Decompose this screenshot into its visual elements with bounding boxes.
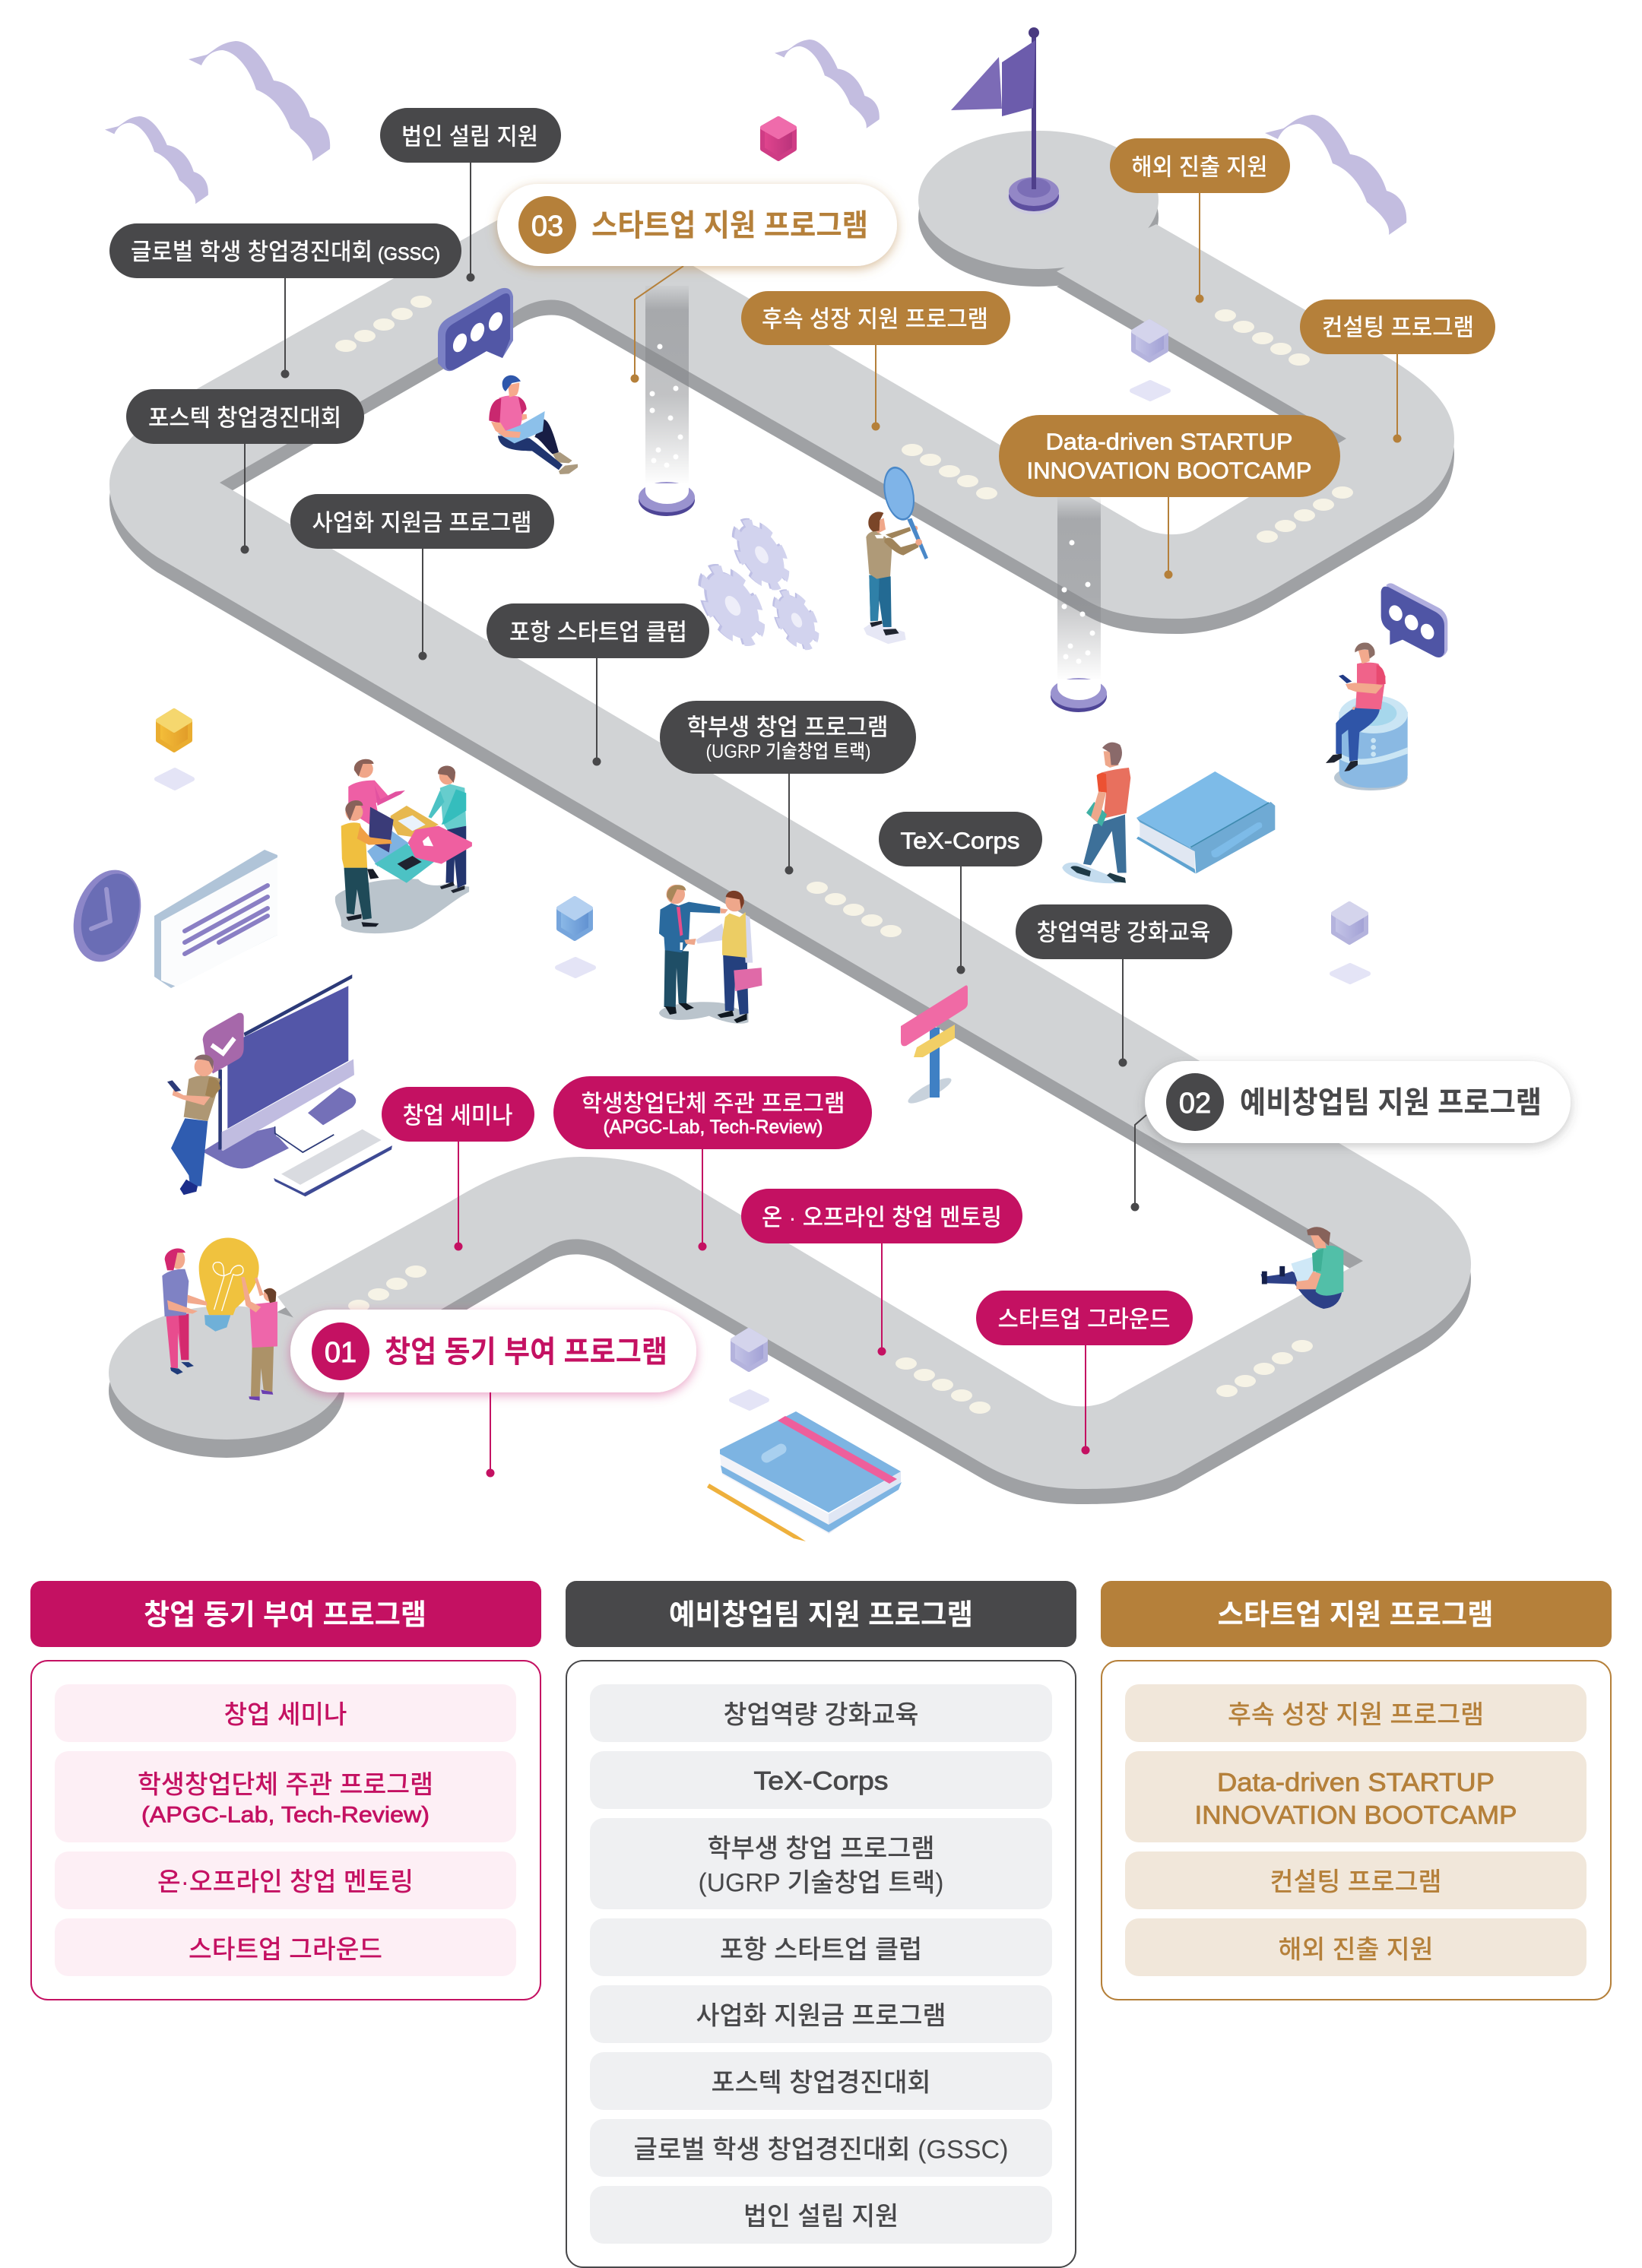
callout: 창업역량 강화교육 — [1016, 904, 1232, 1067]
panel: 스타트업 지원 프로그램: 컨설팅 프로그램 — [1270, 1868, 1441, 1897]
callout: 포항 스타트업 클럽 — [487, 603, 709, 766]
callout: 포항 스타트업 클럽: 포항 스타트업 클럽 — [509, 619, 687, 646]
callout: 학부생 창업 프로그램: (UGRP 기술창업 트랙) — [705, 741, 871, 762]
callout: 03 스타트업 지원 프로그램: 03 — [531, 211, 563, 242]
callout: 03 스타트업 지원 프로그램: 스타트업 지원 프로그램 — [591, 209, 868, 242]
illustration: person on database and chat bubble — [1326, 583, 1447, 790]
illustration: people holding light bulb — [162, 1238, 277, 1401]
icon: lavender cube right — [1332, 904, 1368, 982]
callout: 컨설팅 프로그램: 컨설팅 프로그램 — [1322, 315, 1474, 341]
panel: 예비창업팀 지원 프로그램: TeX-Corps — [754, 1766, 888, 1795]
callout: Data-driven STARTUP INNOVATION BOOTCAMP: INNOVATION BOOTCAMP — [1026, 458, 1312, 483]
panel: 스타트업 지원 프로그램: 후속 성장 지원 프로그램 — [1228, 1701, 1484, 1730]
callout: 03 스타트업 지원 프로그램 — [497, 184, 897, 383]
cloud: top centre — [775, 40, 880, 128]
callout: 학부생 창업 프로그램 — [660, 701, 916, 874]
callout: 스타트업 그라운드 — [976, 1291, 1193, 1455]
callout: 글로벌 학생 창업경진대회: 글로벌 학생 창업경진대회 — [131, 239, 372, 265]
panel: 창업 동기 부여 프로그램: 창업 세미나 — [223, 1701, 347, 1730]
callout: TeX-Corps — [879, 812, 1042, 974]
illustration: computer with person — [167, 974, 392, 1196]
icon: blue cube — [557, 898, 594, 976]
illustration: handshake — [659, 885, 762, 1024]
panel: 창업 동기 부여 프로그램: 학생창업단체 주관 프로그램 — [138, 1771, 433, 1800]
callout: 창업 세미나 — [382, 1087, 534, 1251]
callout: Data-driven STARTUP INNOVATION BOOTCAMP: Data-driven STARTUP — [1046, 429, 1292, 455]
illustration: message card — [154, 850, 277, 988]
panel heading — [1101, 1581, 1612, 1647]
callout: 온·오프라인 창업 멘토링: 온 · 오프라인 창업 멘토링 — [762, 1204, 1002, 1231]
icon: chat bubble on road — [438, 288, 513, 371]
callout: 글로벌 학생 창업경진대회 — [109, 223, 461, 379]
callout: 창업역량 강화교육: 창업역량 강화교육 — [1037, 920, 1210, 946]
callout: 학부생 창업 프로그램: 학부생 창업 프로그램 — [687, 714, 888, 740]
callout: 02 예비창업팀 지원 프로그램: 예비창업팀 지원 프로그램 — [1240, 1086, 1542, 1120]
callout: 법인 설립 지원: 법인 설립 지원 — [401, 123, 538, 150]
illustration: signpost — [901, 985, 968, 1107]
callout: 후속 성장 지원 프로그램 — [741, 291, 1010, 430]
callout: 사업화 지원금 프로그램: 사업화 지원금 프로그램 — [312, 509, 532, 537]
panel: 예비창업팀 지원 프로그램: 예비창업팀 지원 프로그램 — [669, 1599, 973, 1631]
callout: 01 창업 동기 부여 프로그램: 창업 동기 부여 프로그램 — [385, 1335, 667, 1369]
panel: 예비창업팀 지원 프로그램: 창업역량 강화교육 — [724, 1701, 918, 1730]
panel: 스타트업 지원 프로그램: Data-driven STARTUP — [1217, 1768, 1495, 1797]
panel: 창업 동기 부여 프로그램: 창업 동기 부여 프로그램 — [144, 1599, 426, 1631]
panel: 창업 동기 부여 프로그램: 온·오프라인 창업 멘토링 — [157, 1868, 414, 1897]
callout: 학생창업단체 주관 프로그램: 학생창업단체 주관 프로그램 — [581, 1090, 845, 1117]
panel: 예비창업팀 지원 프로그램: 학부생 창업 프로그램 — [707, 1835, 935, 1864]
panel: 스타트업 지원 프로그램: 스타트업 지원 프로그램 — [1218, 1599, 1493, 1631]
pillar: right light column — [1051, 497, 1107, 712]
callout: 포스텍 창업경진대회: 포스텍 창업경진대회 — [148, 404, 341, 432]
callout: 01 창업 동기 부여 프로그램: 01 — [325, 1337, 357, 1369]
panel: 창업 동기 부여 프로그램 — [30, 1581, 541, 2000]
panel: 창업 동기 부여 프로그램: 스타트업 그라운드 — [189, 1935, 382, 1964]
callout: 법인 설립 지원 — [380, 108, 561, 281]
panel: 스타트업 지원 프로그램 — [1101, 1581, 1612, 2000]
callout: 02 예비창업팀 지원 프로그램 — [1131, 1061, 1571, 1212]
illustration: person reading on road — [1261, 1227, 1343, 1309]
pillar: left light column — [639, 286, 695, 516]
callout: 해외 진출 지원: 해외 진출 지원 — [1131, 154, 1268, 181]
callout: Data-driven STARTUP INNOVATION BOOTCAMP — [999, 415, 1340, 579]
callout: 사업화 지원금 프로그램 — [290, 494, 554, 660]
callout: 학생창업단체 주관 프로그램 — [553, 1076, 872, 1251]
panel: 예비창업팀 지원 프로그램: (UGRP 기술창업 트랙) — [698, 1868, 944, 1897]
callout: 스타트업 그라운드: 스타트업 그라운드 — [997, 1306, 1171, 1333]
callout: 02 예비창업팀 지원 프로그램: 02 — [1179, 1088, 1211, 1120]
illustration: person with laptop — [489, 375, 578, 474]
panel: 예비창업팀 지원 프로그램: 사업화 지원금 프로그램 — [696, 2002, 946, 2031]
road: isometric S-shaped roadmap — [109, 131, 1471, 1504]
panel: 창업 동기 부여 프로그램: (APGC-Lab, Tech-Review) — [141, 1803, 430, 1827]
icon: lavender cube lower — [731, 1330, 767, 1408]
icon: lavender cube on road — [1132, 322, 1168, 399]
illustration: person with magnifier — [864, 464, 928, 644]
icon: yellow cube — [157, 711, 192, 788]
icon: flag on base — [951, 27, 1060, 214]
panel heading — [30, 1581, 541, 1647]
callout: 컨설팅 프로그램 — [1300, 299, 1495, 442]
panel heading — [566, 1581, 1076, 1647]
panel: 스타트업 지원 프로그램: 해외 진출 지원 — [1279, 1935, 1434, 1964]
cloud: upper left large — [189, 41, 330, 161]
illustration: walking person and large blue book — [1062, 743, 1275, 883]
panel: 예비창업팀 지원 프로그램: 글로벌 학생 창업경진대회 (GSSC) — [634, 2136, 1008, 2165]
panel: 스타트업 지원 프로그램: INNOVATION BOOTCAMP — [1195, 1801, 1517, 1830]
panel: 예비창업팀 지원 프로그램: 법인 설립 지원 — [743, 2203, 899, 2232]
callout: 01 창업 동기 부여 프로그램 — [290, 1310, 696, 1478]
callout: 온·오프라인 창업 멘토링 — [741, 1189, 1022, 1356]
illustration: team around puzzle table — [335, 759, 472, 933]
cloud: upper right — [1265, 115, 1406, 235]
callout: TeX-Corps: TeX-Corps — [900, 827, 1020, 854]
callout: 학생창업단체 주관 프로그램: (APGC-Lab, Tech-Review) — [604, 1117, 823, 1138]
icon: gears — [702, 512, 816, 654]
panel: 예비창업팀 지원 프로그램 — [566, 1581, 1076, 2267]
illustration: notebook and pencil — [707, 1411, 902, 1541]
panel: 예비창업팀 지원 프로그램: 포항 스타트업 클럽 — [720, 1935, 922, 1964]
callout: 창업 세미나: 창업 세미나 — [403, 1102, 512, 1129]
callout: 포스텍 창업경진대회 — [126, 389, 364, 553]
callout: 해외 진출 지원 — [1110, 138, 1290, 303]
icon: pink cube with shadow — [762, 119, 794, 201]
illustration: clock — [62, 861, 152, 971]
callout: 글로벌 학생 창업경진대회: (GSSC) — [378, 244, 440, 264]
panel: 예비창업팀 지원 프로그램: 포스텍 창업경진대회 — [712, 2069, 930, 2098]
callout: 후속 성장 지원 프로그램: 후속 성장 지원 프로그램 — [762, 306, 988, 333]
road lane markers — [335, 296, 1353, 1414]
cloud: upper left small — [105, 116, 208, 204]
